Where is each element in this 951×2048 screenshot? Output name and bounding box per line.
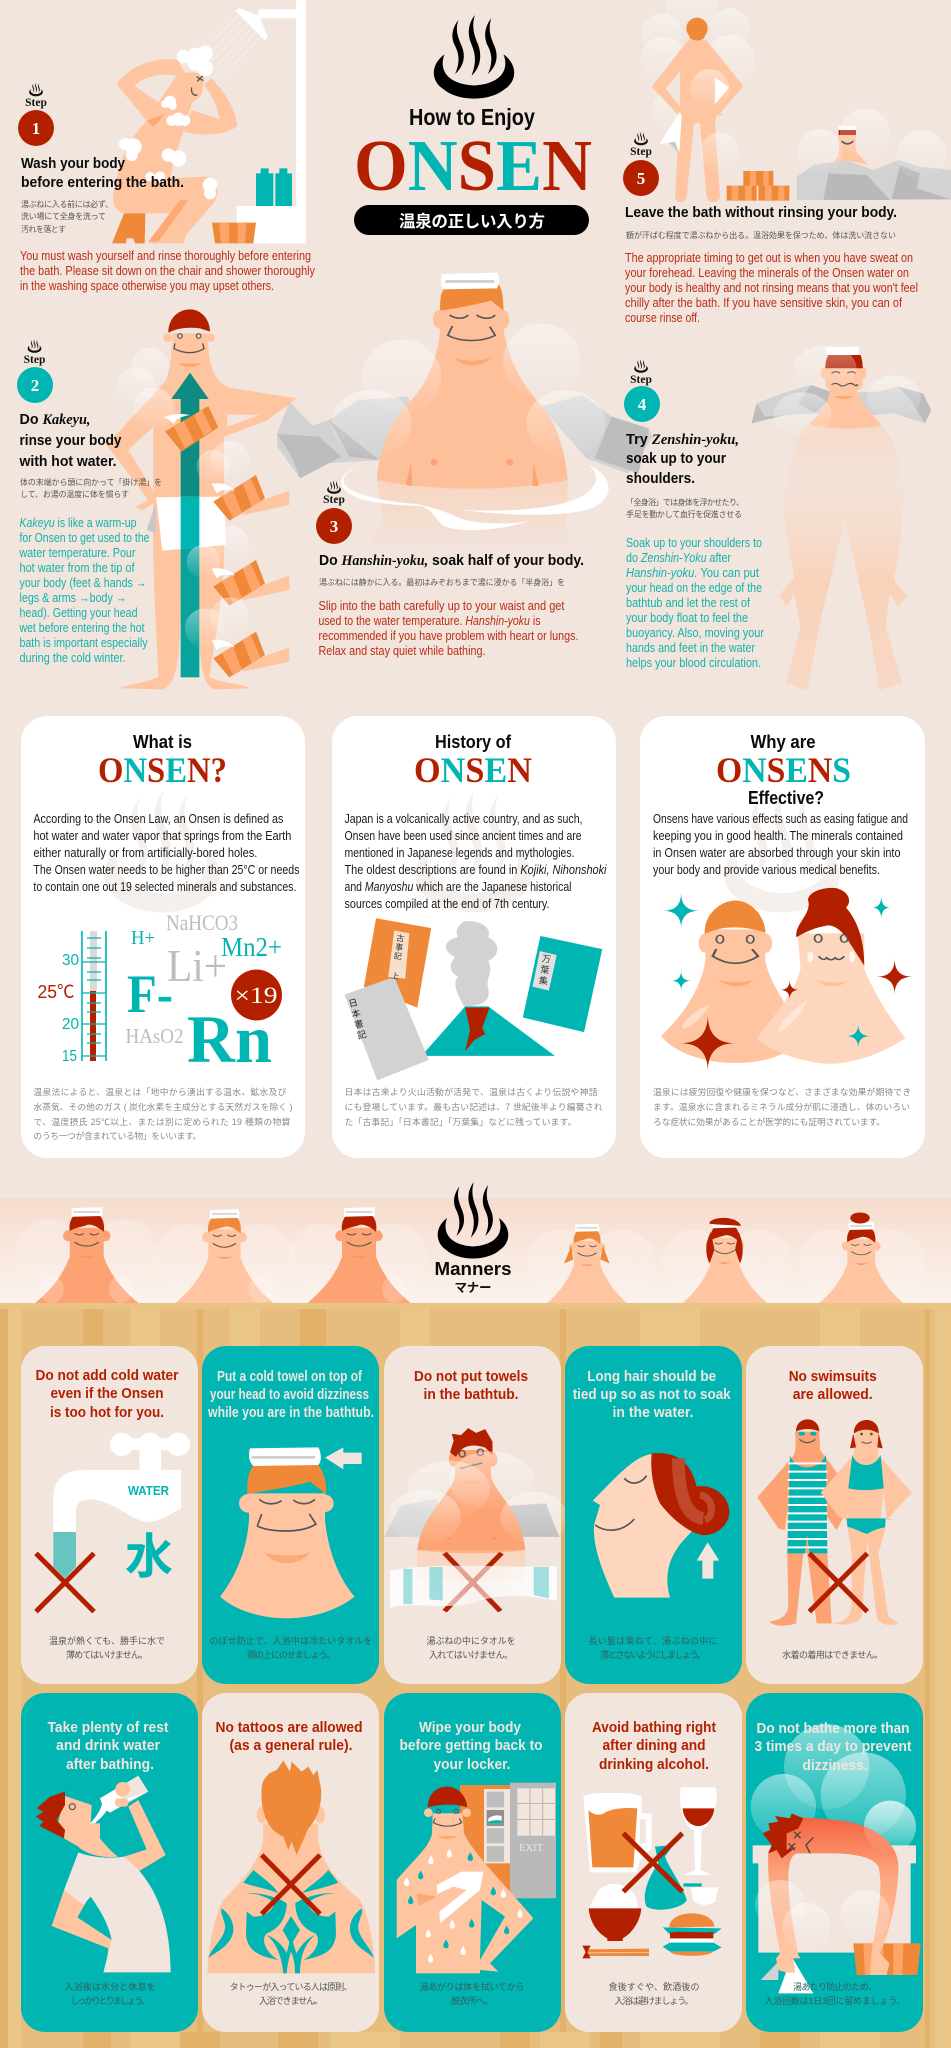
illustration: relaxed head with towel: [220, 1447, 362, 1618]
mineral symbols: [126, 910, 282, 1077]
card title: are allowed.: [793, 1387, 873, 1403]
illustration: bather with towel crossed out: [384, 1428, 567, 1611]
body text: Japan is a volcanically active country, and as such,: [344, 812, 582, 826]
card title: dizziness.: [802, 1758, 868, 1774]
step 1 japanese note: 湯ぶねに入る前には必ず、: [21, 199, 113, 209]
step 3 body: Slip into the bath carefully up to your waist and get: [318, 599, 565, 613]
japanese caption: ろな症状に効果があることが医学的にも証明されています。: [653, 1116, 885, 1127]
heading: history of onsen: History of: [435, 732, 512, 752]
card: do not bathe more than 3 times: [746, 1693, 923, 2032]
step badge 5: Step: [630, 146, 652, 158]
step badge 5: [623, 132, 659, 196]
step badge 4: 4: [638, 395, 647, 414]
japanese caption: 温泉法によると、温泉とは「地中から湧出する温水、鉱水及び: [33, 1086, 287, 1097]
manners title: Manners: [434, 1259, 512, 1279]
illustration: books and volcano: 日: [348, 997, 359, 1009]
heading: what is onsen: What is: [133, 732, 192, 752]
step 5 body: course rinse off.: [625, 311, 700, 325]
body text: and Manyoshu which are the Japanese historical: [344, 880, 572, 894]
manners band background: [0, 1198, 951, 1303]
illustration: profile with hair bun: [593, 1453, 729, 1598]
step 5 text: [623, 132, 918, 325]
card title: drinking alcohol.: [599, 1757, 709, 1773]
card title: Wipe your body: [419, 1720, 521, 1736]
body text: keeping you in good health. The minerals contained: [653, 829, 903, 843]
card: wipe your body: [384, 1693, 561, 2032]
illustration: books and volcano: 葉: [540, 963, 550, 976]
card title: [414, 1369, 528, 1403]
step 4 heading: [626, 432, 739, 487]
mineral symbols: HAsO2: [126, 1024, 184, 1048]
mineral symbols: H+: [131, 927, 155, 949]
step 2 heading: [19, 412, 121, 470]
step 1 illustration: man washing in shower: [112, 0, 306, 243]
step 2 heading: rinse your body: [20, 433, 122, 449]
card title: after dining and: [602, 1738, 706, 1754]
step 2 body: your body (feet & hands →: [20, 576, 146, 590]
card title: is too hot for you.: [50, 1405, 164, 1421]
step 4 body: helps your blood circulation.: [626, 656, 761, 670]
wood floor background: [0, 1303, 951, 2048]
step 5 japanese note: 額が汗ばむ程度で湯ぶねから出る。温浴効果を保つため、体は洗い流さない: [626, 230, 896, 240]
illustration: books and volcano: 本: [350, 1007, 362, 1020]
card caption: 薄めてはいけません。: [66, 1649, 148, 1660]
step 4 illustration: man fully soaked floating: [751, 346, 931, 690]
illustration: books and volcano: 集: [538, 974, 549, 986]
step 2 body: wet before entering the hot: [19, 621, 145, 635]
card title: Do not bathe more than: [756, 1721, 910, 1737]
step 3 illustration: man half soaked with rocks: [277, 273, 653, 553]
title block: [354, 15, 592, 235]
step badge 4: Step: [630, 374, 652, 386]
label: exit: EXIT: [519, 1842, 543, 1854]
step 2 heading: with hot water.: [19, 454, 116, 470]
card caption: 食後すぐや、飲酒後の: [608, 1981, 700, 1992]
thermometer chart: 30: [62, 952, 79, 969]
step 3 body: [318, 599, 578, 658]
card: no towels in bathtub: [384, 1346, 567, 1684]
badge: times 19: [231, 970, 282, 1020]
illustration: books and volcano: 古: [396, 933, 405, 944]
step 1 japanese note: 汚れを落とす: [21, 224, 66, 234]
card title: before getting back to: [400, 1738, 543, 1754]
step 2 body: legs & arms →body →: [20, 591, 126, 605]
card caption: [426, 1635, 516, 1660]
body text: hot water and water vapor that springs from the Earth: [33, 829, 291, 843]
card title: your locker.: [434, 1757, 510, 1773]
illustration: tattooed back crossed out: [207, 1761, 375, 1973]
card caption: 入浴は避けましょう。: [614, 1995, 694, 2006]
step 3 body: used to the water temperature. Hanshin-yoku is: [318, 614, 540, 628]
step 2 body: hot water from the tip of: [20, 561, 135, 575]
japanese caption: 日本は古来より火山活動が活発で、温泉は古くより伝説や神話: [344, 1086, 598, 1097]
card title: Avoid bathing right: [592, 1720, 716, 1736]
japanese caption: [344, 1086, 603, 1127]
body text: [653, 812, 908, 877]
step 4 japanese note: 「全身浴」では身体を浮かせたり、: [626, 497, 744, 507]
step badge 3: 3: [330, 517, 338, 536]
card caption: 湯あたり防止のため、: [793, 1981, 877, 1992]
step 2 body: water temperature. Pour: [19, 546, 136, 560]
step 2 japanese note: 体の末端から頭に向かって「掛け湯」を: [20, 477, 162, 487]
card caption: 入浴後は水分と休息を: [64, 1981, 156, 1992]
card: no tattoos: [202, 1693, 379, 2032]
step 1 japanese note: 洗い場にて全身を洗って: [21, 211, 106, 221]
body text: either naturally or from artificially-bored holes.: [33, 846, 257, 860]
card: avoid bathing after dining: [565, 1693, 742, 2032]
card title: (as a general rule).: [230, 1738, 352, 1754]
panel: why are onsens effective: [640, 716, 925, 1158]
heading: history of onsen: [414, 732, 532, 790]
step 3 japanese note: 湯ぶねには静かに入る。最初はみぞおちまで湯に浸かる「半身浴」を: [319, 577, 565, 587]
illustration: food and drink crossed out: [582, 1787, 722, 1958]
illustration: man and woman in swimwear: [757, 1419, 912, 1626]
step 5 heading: Leave the bath without rinsing your body.: [625, 205, 897, 221]
card title: [592, 1720, 716, 1773]
card caption: [764, 1981, 906, 2006]
card: cold towel on head: [202, 1346, 379, 1684]
card title: Do not put towels: [414, 1369, 528, 1385]
heading: why are onsens effective: Why are: [750, 732, 816, 752]
card title: in the bathtub.: [424, 1387, 518, 1403]
card title: Put a cold towel on top of: [217, 1369, 362, 1385]
japanese caption: にも登場しています。最も古い記述は、7 世紀後半より編纂され: [344, 1101, 603, 1112]
card title: [400, 1720, 543, 1773]
body text: Onsen have been used since ancient times and are: [344, 829, 582, 843]
card title: [754, 1721, 912, 1774]
card title: while you are in the bathtub.: [207, 1405, 374, 1421]
card caption: 長い髪は束ねて、湯ぶねの中に: [588, 1635, 718, 1646]
step 2 japanese note: [20, 477, 162, 499]
step 1 heading: Wash your body: [21, 156, 125, 172]
step 1 heading: [21, 156, 184, 191]
card title: your head to avoid dizziness: [210, 1387, 369, 1403]
manners bathers row: [15, 1207, 925, 1303]
card title: [573, 1369, 732, 1421]
card caption: 入浴できません。: [259, 1995, 323, 2006]
icon: onsen mark: [434, 15, 514, 99]
illustration: man drinking water: [36, 1776, 171, 1972]
card title: Long hair should be: [587, 1369, 716, 1385]
step 2 body: during the cold winter.: [20, 651, 126, 665]
card caption: [210, 1635, 372, 1660]
card caption: 頭の上にのせましょう。: [247, 1650, 335, 1660]
card title: [789, 1369, 877, 1403]
step 2 body: bath is important especially: [20, 636, 148, 650]
icon: onsen mark: [438, 1182, 508, 1258]
card title: even if the Onsen: [50, 1386, 164, 1402]
card title: No tattoos are allowed: [216, 1720, 362, 1736]
manners subtitle: マナー: [454, 1281, 492, 1295]
label: water: WATER: [128, 1484, 169, 1498]
step 2 japanese note: して、お湯の温度に体を慣らす: [20, 489, 129, 499]
body text: in Onsen water are absorbed through your skin into: [653, 846, 900, 860]
thermometer chart: [38, 931, 106, 1065]
japanese caption: [653, 1086, 911, 1127]
step 4 body: hands and feet in the water: [626, 641, 755, 655]
step 4 body: do Zenshin-Yoku after: [626, 551, 731, 565]
mineral symbols: Rn: [187, 1001, 272, 1077]
japanese caption: 水蒸気、その他のガス ( 炭化水素を主成分とする天然ガスを除く ): [33, 1101, 292, 1112]
step badge 5: 5: [637, 169, 645, 188]
illustration: dizzy man over bathtub: [751, 1724, 921, 1993]
card caption: 湯あがりは体を拭いてから: [420, 1981, 524, 1992]
step 1 body: the bath. Please sit down on the chair and shower thoroughly: [20, 264, 316, 278]
card caption: [608, 1981, 700, 2006]
card caption: のぼせ防止で、入浴中は冷たいタオルを: [210, 1635, 372, 1646]
japanese caption: [33, 1086, 292, 1141]
step 3 heading: Do Hanshin-yoku, soak half of your body.: [319, 553, 584, 569]
card title: 3 times a day to prevent: [754, 1739, 912, 1755]
step 4 body: Soak up to your shoulders to: [626, 536, 762, 550]
step 4 japanese note: [626, 497, 744, 519]
step badge 3: Step: [323, 494, 345, 506]
step 3 body: Relax and stay quiet while bathing.: [318, 644, 486, 658]
heading: why are onsens effective: ONSENS: [716, 750, 851, 790]
card title: after bathing.: [66, 1757, 154, 1773]
card caption: [49, 1635, 165, 1660]
body text: sources compiled at the end of 7th century.: [344, 897, 550, 911]
japanese caption: のうち一つが含まれている物」をいいます。: [33, 1130, 201, 1141]
heading: what is onsen: [98, 732, 227, 790]
step 2 text: [17, 340, 162, 665]
step 3 body: recommended if you have problem with heart or lungs.: [318, 629, 578, 643]
step 4 body: buoyancy. Also, moving your: [626, 626, 764, 640]
step 5 body: [625, 251, 918, 325]
card title: tied up so as not to soak: [573, 1387, 732, 1403]
step 4 heading: Try Zenshin-yoku,: [626, 432, 739, 448]
card caption: 落とさないようにしましょう。: [600, 1649, 706, 1660]
label: kanji water: 水: [125, 1531, 173, 1584]
card title: and drink water: [56, 1738, 160, 1754]
body text: mentioned in Japanese legends and mythologies.: [344, 846, 574, 860]
body text: According to the Onsen Law, an Onsen is defined as: [33, 812, 283, 826]
card title: [48, 1720, 169, 1773]
step 1 body: [20, 249, 316, 293]
illustration: faucet with X: [36, 1433, 190, 1612]
step 4 body: your body float to feel the: [626, 611, 748, 625]
body text: [344, 812, 608, 911]
step badge 4: [624, 360, 660, 422]
body text: [33, 812, 299, 894]
card caption: [420, 1981, 524, 2006]
illustration: man wiping body by lockers: [397, 1783, 556, 1973]
step 2 heading: Do Kakeyu,: [20, 412, 90, 428]
subtitle pill: [354, 205, 589, 235]
step 1 japanese note: [21, 199, 113, 234]
step badge 2: Step: [24, 354, 45, 366]
step 2 illustration: man pouring water, rising arrow: [107, 309, 297, 689]
step 1 text: [18, 83, 316, 293]
body text: your body and provide various medical benefits.: [653, 863, 880, 877]
heading: what is onsen: ONSEN?: [98, 750, 227, 790]
mineral symbols: Mn2+: [221, 932, 282, 962]
step 1 heading: before entering the bath.: [21, 175, 184, 191]
step 4 heading: soak up to your: [626, 451, 726, 467]
card caption: [588, 1635, 718, 1660]
mineral symbols: Li+: [167, 941, 227, 991]
step 5 body: your forehead. Leaving the minerals of the Onsen water on: [625, 266, 909, 280]
card title: [216, 1720, 362, 1754]
step 4 heading: shoulders.: [626, 471, 695, 487]
card: no swimsuits: [746, 1346, 923, 1684]
heading: onsen: ONSEN: [354, 125, 592, 206]
step 3 text: [316, 480, 584, 658]
card caption: 温泉が熱くても、勝手に水で: [49, 1635, 165, 1646]
illustration: books and volcano: 万: [541, 953, 552, 965]
step 2 body: head). Getting your head: [20, 606, 138, 620]
card caption: 入浴回数は1日3回に留めましょう。: [764, 1995, 906, 2006]
card title: No swimsuits: [789, 1369, 877, 1385]
heading: why are onsens effective: [716, 732, 851, 808]
illustration: happy couple with sparkles: [661, 888, 913, 1072]
illustration: books and volcano: 事: [395, 941, 404, 952]
step badge 1: 1: [32, 119, 40, 138]
step 4 body: bathtub and let the rest of: [626, 596, 750, 610]
panel: what is onsen: [21, 716, 305, 1158]
card title: in the water.: [612, 1405, 694, 1421]
card caption: [64, 1981, 156, 2006]
subtitle pill: 温泉の正しい入り方: [399, 211, 545, 231]
step 2 body: [19, 516, 150, 665]
card caption: 湯ぶねの中にタオルを: [426, 1635, 516, 1646]
illustration: books and volcano: 書: [353, 1017, 365, 1030]
step 1 body: in the washing space otherwise you may upset others.: [20, 279, 274, 293]
step badge 1: [18, 83, 54, 146]
step 4 text: [624, 360, 764, 670]
body text: to contain one out 19 selected minerals and substances.: [33, 880, 296, 894]
thermometer chart: 15: [62, 1048, 77, 1065]
card caption: 水着の着用はできません。: [782, 1649, 883, 1660]
japanese caption: 温泉には疲労回復や健康を保つなど、さまざまな効果が期待でき: [653, 1086, 911, 1097]
body text: The Onsen water needs to be higher than 25°C or needs: [33, 863, 299, 877]
card caption: しっかりとりましょう。: [70, 1996, 150, 2006]
step badge 1: Step: [25, 97, 47, 109]
step 5 illustration: man leaving the bath: [640, 0, 951, 202]
japanese caption: た「古事記」「日本書記」「万葉集」などに残っています。: [344, 1116, 576, 1127]
step 1 body: You must wash yourself and rinse thoroughly before entering: [20, 249, 311, 263]
card title: [207, 1369, 374, 1421]
badge: times 19: ×19: [234, 983, 278, 1008]
illustration: books and volcano: [344, 918, 602, 1080]
step 2 body: for Onsen to get used to the: [20, 531, 150, 545]
step badge 2: [17, 340, 53, 403]
card title: [36, 1368, 179, 1421]
card title: Take plenty of rest: [48, 1720, 169, 1736]
step badge 3: [316, 480, 352, 544]
mineral symbols: NaHCO3: [166, 910, 238, 935]
step 2 body: Kakeyu is like a warm-up: [20, 516, 136, 530]
illustration: books and volcano: 上: [390, 971, 400, 981]
mineral symbols: F-: [127, 964, 173, 1024]
japanese caption: ます。温泉水に含まれるミネラル成分が肌に浸透し、体のいろい: [653, 1101, 910, 1112]
card caption: タトゥーが入っている人は原則、: [230, 1981, 352, 1992]
heading: history of onsen: ONSEN: [414, 750, 532, 790]
step 4 body: [626, 536, 764, 670]
card caption: 入れてはいけません。: [429, 1650, 513, 1660]
card caption: [230, 1981, 352, 2006]
step 4 body: your head on the edge of the: [626, 581, 762, 595]
card caption: 脱衣所へ。: [451, 1995, 493, 2006]
step 4 japanese note: 手足を動かして血行を促進させる: [626, 509, 742, 519]
card: do not add cold water: [21, 1346, 198, 1684]
card: tie up long hair: [565, 1346, 742, 1684]
panel: history of onsen: [332, 716, 616, 1158]
thermometer chart: 20: [62, 1016, 79, 1033]
thermometer chart: 25℃: [38, 982, 74, 1002]
heading: why are onsens effective: Effective?: [748, 788, 824, 808]
step 4 body: Hanshin-yoku. You can put: [626, 566, 759, 580]
body text: The oldest descriptions are found in Kojiki, Nihonshoki: [344, 863, 608, 877]
illustration: books and volcano: 記: [356, 1029, 367, 1041]
heading: how to enjoy: How to Enjoy: [409, 104, 535, 130]
step 5 body: chilly after the bath. If you have sensitive skin, you can of: [625, 296, 902, 310]
card: rest and drink water: [21, 1693, 198, 2032]
illustration: books and volcano: 記: [393, 951, 402, 961]
manners heading: [434, 1182, 512, 1295]
step badge 2: 2: [31, 376, 39, 395]
card title: Do not add cold water: [36, 1368, 179, 1384]
japanese caption: で、温度摂氏 25℃以上、または別に定められた 19 種類の物質: [33, 1116, 291, 1127]
